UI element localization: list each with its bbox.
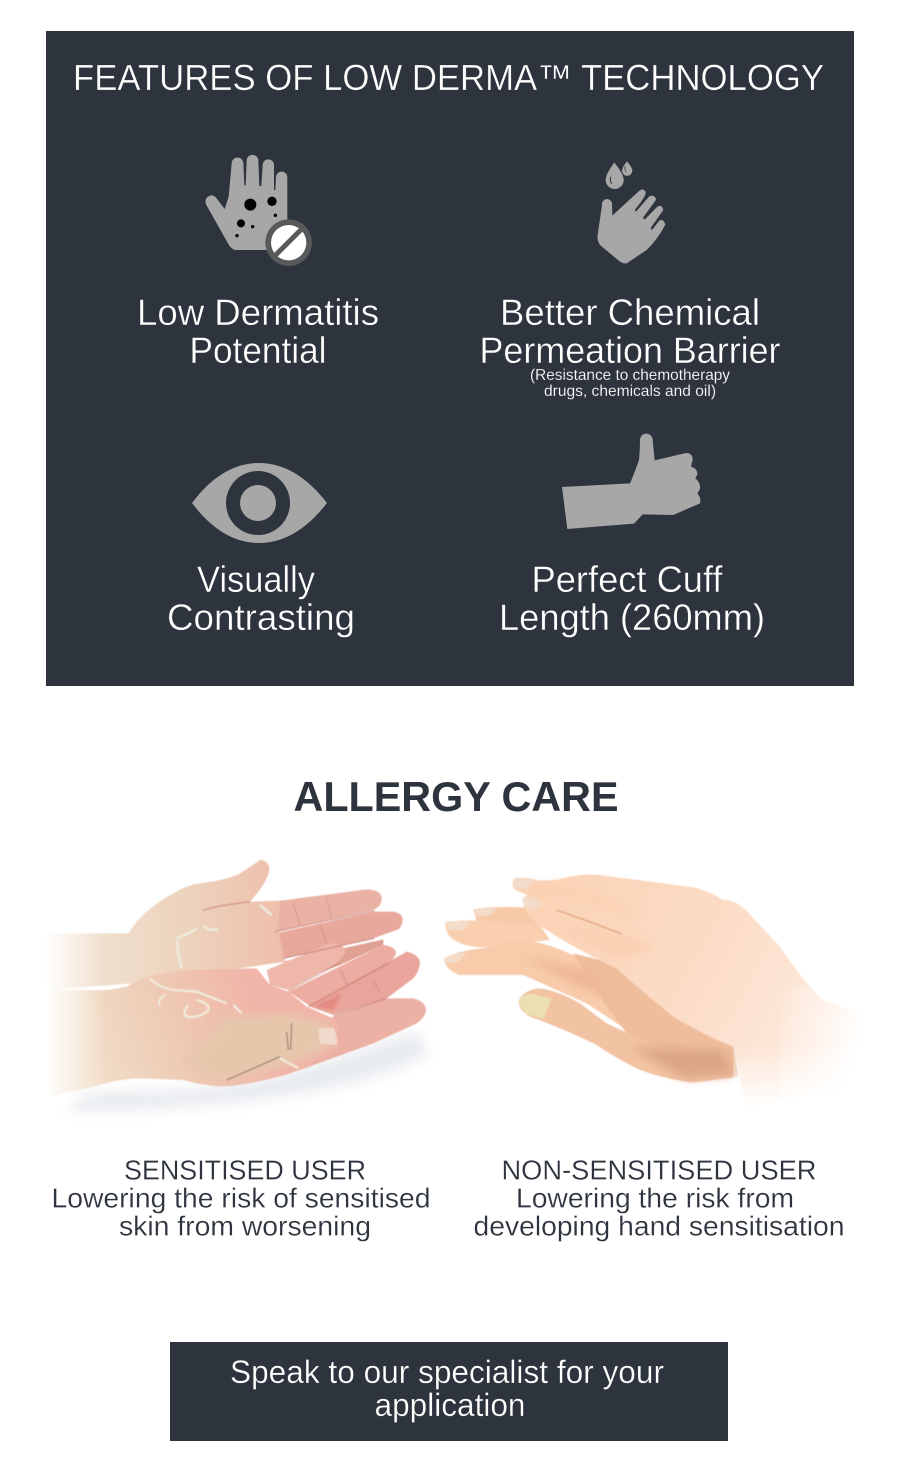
caption: sensitised user: skin from worsening xyxy=(119,1210,371,1242)
call-to-action button xyxy=(170,1342,728,1441)
feature label: low dermatitis potential: Low Dermatitis xyxy=(137,292,379,333)
feature label: better chemical permeation barrier xyxy=(480,292,780,400)
lower hand xyxy=(267,943,345,990)
finger creases xyxy=(203,902,388,1016)
caption: sensitised user: SENSITISED USER xyxy=(124,1154,366,1186)
upper hand xyxy=(283,939,383,978)
upper hand xyxy=(513,875,870,1108)
call-to-action button: Speak to our specialist for your xyxy=(230,1354,664,1390)
feature note: resistance: drugs, chemicals and oil) xyxy=(544,383,716,400)
icon: eye xyxy=(192,463,327,543)
panel title: FEATURES OF LOW DERMA™ TECHNOLOGY xyxy=(73,57,824,98)
fingernails xyxy=(444,878,544,963)
heading: allergy care: ALLERGY CARE xyxy=(294,773,618,820)
feature label: better chemical permeation barrier: Permeation Barrier xyxy=(480,330,780,371)
caption: non-sensitised user: developing hand sensitisation xyxy=(474,1210,844,1242)
feature note: resistance xyxy=(530,367,730,400)
caption: non-sensitised user xyxy=(474,1154,844,1242)
feature label: low dermatitis potential: Potential xyxy=(190,330,326,371)
peeling skin xyxy=(177,905,272,968)
feature label: perfect cuff length xyxy=(499,559,765,638)
caption: non-sensitised user: NON-SENSITISED USER xyxy=(502,1154,816,1186)
feature label: better chemical permeation barrier: Better Chemical xyxy=(500,292,760,333)
feature label: visually contrasting: Visually xyxy=(197,559,315,600)
icon: thumbs up xyxy=(562,434,700,529)
call-to-action button: application xyxy=(374,1387,526,1423)
caption: non-sensitised user: Lowering the risk from xyxy=(516,1182,794,1214)
feature label: low dermatitis potential xyxy=(137,292,379,371)
feature label: perfect cuff length: Length (260mm) xyxy=(499,597,765,638)
features panel xyxy=(46,31,854,686)
lower hand xyxy=(473,907,547,927)
feature label: visually contrasting xyxy=(167,559,355,638)
photo: healthy hands xyxy=(444,875,887,1120)
icon: hand with dermatitis spots and prohibition sign xyxy=(206,155,312,266)
feature label: visually contrasting: Contrasting xyxy=(167,597,355,638)
caption: sensitised user: Lowering the risk of sensitised xyxy=(52,1182,431,1214)
feature label: perfect cuff length: Perfect Cuff xyxy=(532,559,723,600)
photo: sensitised hands xyxy=(40,860,428,1112)
icon: hand with chemical droplets xyxy=(597,161,665,263)
caption: sensitised user xyxy=(52,1154,431,1242)
feature note: resistance: (Resistance to chemotherapy xyxy=(530,367,730,384)
